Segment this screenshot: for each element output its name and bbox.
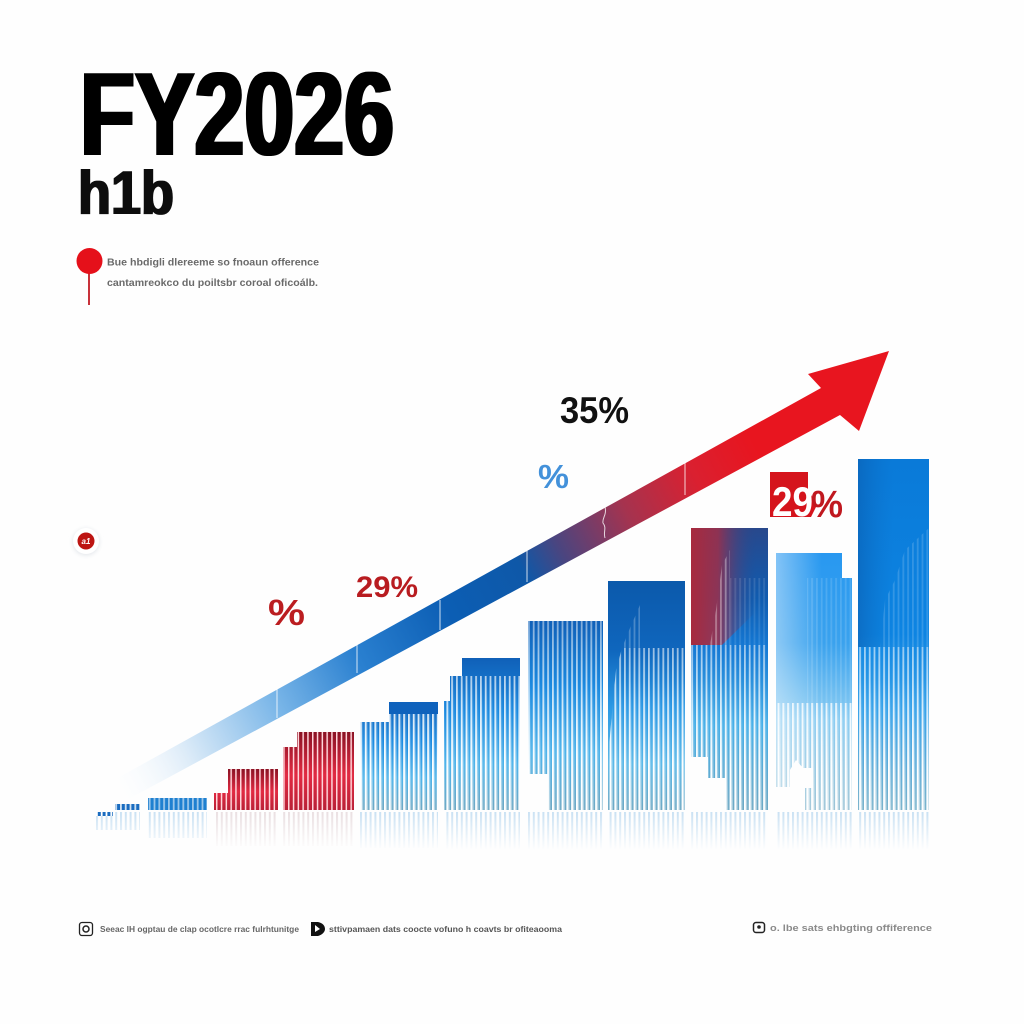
bar 6: [444, 658, 520, 810]
description text: [107, 256, 319, 289]
footer note 2: sttivpamaen dats coocte vofuno h coavts br ofiteaooma: [329, 924, 562, 934]
label: boxed 29%: %: [811, 484, 843, 526]
bar 2: [148, 798, 207, 810]
icon: red badge: [73, 528, 99, 555]
footer note 2: [311, 922, 562, 936]
bar chart: [96, 459, 929, 850]
label: 35%: 35%: [560, 390, 629, 431]
footer note 1: Seeac lH ogptau de clap ocotlcre rrac fulrhtunitge: [100, 924, 299, 934]
subtitle: h1b: [78, 159, 174, 228]
description text: cantamreokco du poiltsbr coroal oficoálb.: [107, 277, 318, 289]
icon: small square: [754, 922, 764, 932]
bar 7: [526, 621, 603, 811]
title: FY2026: [80, 48, 394, 181]
bar 10 light blue: [776, 553, 852, 811]
bar 8: [608, 581, 685, 810]
footer note 3: o. lbe sats ehbgting offiference: [770, 923, 932, 934]
label: red 29%: 29%: [356, 571, 418, 604]
bar 5: [360, 702, 438, 810]
bar 11 tall blue: [858, 459, 929, 810]
bar 4 red: [283, 732, 354, 810]
icon: red badge: a1: [82, 537, 91, 546]
label: blue percent: %: [538, 458, 569, 495]
icon: square: [80, 922, 92, 936]
bar reflections: [96, 812, 928, 844]
bar 1 small: [96, 804, 140, 816]
icon: play D: [311, 922, 325, 936]
label: boxed 29%: 29: [772, 478, 813, 525]
label: red percent: %: [268, 592, 305, 633]
bar 3 red: [214, 769, 278, 810]
label: boxed 29%: [770, 472, 843, 526]
icon: red pin: [76, 248, 102, 305]
bar 9 red-navy: [688, 528, 768, 811]
footer note 1: [80, 922, 299, 936]
description text: Bue hbdigli dlereeme so fnoaun ofference: [107, 256, 319, 268]
growth arrow: [105, 351, 889, 808]
